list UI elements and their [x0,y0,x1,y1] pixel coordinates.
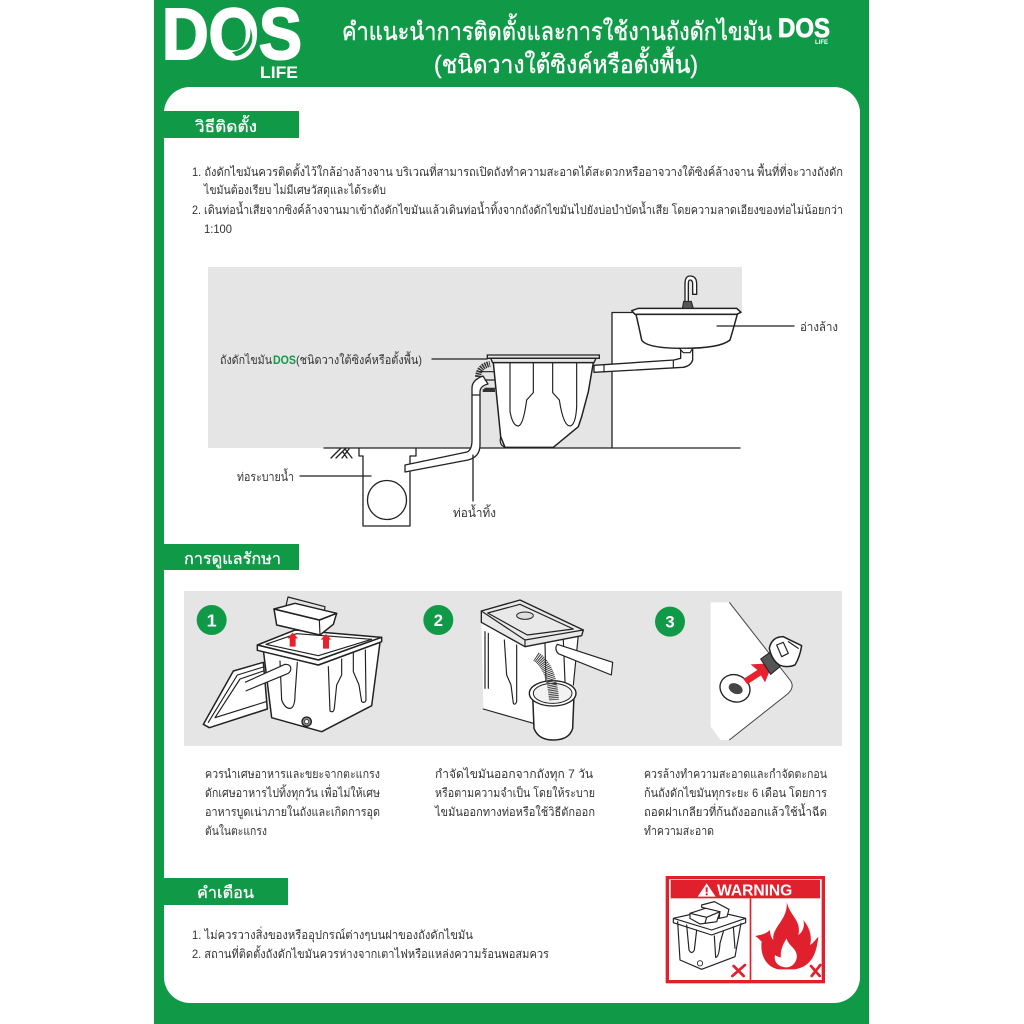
sink [632,308,741,353]
heading tab: maintenance: การดูแลรักษา [184,551,281,569]
step 1 text: ดักเศษอาหารไปทิ้งทุกวัน เพื่อไม่ให้เศษ [205,784,380,801]
loaded tank icon [673,902,746,969]
label: drain pipe: ท่อระบายน้ำ [237,468,294,484]
warning list: 2. สถานที่ติดตั้งถังดักไขมันควรห่างจากเตาไฟหรือแหล่งความร้อนพอสมควร [192,945,550,961]
step 2 text [434,767,595,819]
label: sink [717,320,838,334]
title: คำแนะนำการติดตั้งและการใช้งานถังดักไขมัน [342,13,772,46]
step 3 illustration [655,602,802,740]
badge 2: 2 [434,611,443,630]
badge 3 [655,607,685,637]
step 3 text: ก้นถังดักไขมันทุกระยะ 6 เดือน โดยการ [644,786,828,801]
heading tab: installation [164,111,299,138]
step 1 illustration [197,597,382,732]
step 3 text: ทำความสะอาด [644,824,714,838]
hose [536,657,554,700]
tank body [257,630,382,732]
divider [750,898,751,980]
bucket [529,681,576,740]
label: grease trap: (ชนิดวางใต้ซิงค์หรือตั้งพื้น) [296,351,422,367]
step 1 text: ควรนำเศษอาหารและขยะจากตะแกรง [205,767,380,781]
installation diagram [208,267,838,526]
warning list [192,926,550,961]
maintenance illustration strip [184,591,842,746]
sink drain pipe [594,348,693,372]
title: DOS [778,13,830,43]
drain ring [715,670,755,707]
warning header [671,880,820,899]
badge 2 [423,605,453,635]
ground line and block wall [324,312,740,448]
label: grease trap: DOS [273,353,296,367]
red arrow [743,663,773,684]
step 2 text: กำจัดไขมันออกจากถังทุก 7 วัน [435,767,593,782]
ground hatch [331,448,352,458]
label: grease trap: ถังดักไขมัน [220,353,272,367]
step 3 text: ควรล้างทำความสะอาดและกำจัดตะกอน [644,767,827,781]
green page background [154,0,869,1024]
label: grease trap [220,351,487,367]
flame icon [755,902,818,969]
grease trap tank [480,355,599,447]
title: (ชนิดวางใต้ซิงค์หรือตั้งพื้น) [434,46,698,79]
step 3 text: ถอดฝาเกลียวที่ก้นถังออกแล้วใช้น้ำฉีด [644,803,827,819]
step 2 text: ไขมันออกทางท่อหรือใช้วิธีตักออก [434,805,595,819]
lid leaning [203,662,267,728]
badge 1 [197,605,227,635]
label: sink: อ่างล้าง [800,320,838,334]
installation instructions: 1:100 [204,222,232,236]
heading tab: installation: วิธีติดตั้ง [195,115,257,136]
title: LIFE [815,40,828,46]
lid [481,600,583,647]
step 3 text [644,767,828,838]
tank [481,622,578,723]
drain plug [761,637,802,674]
warning list: 1. ไม่ควรวางสิ่งของหรืออุปกรณ์ต่างๆบนฝาของถังดักไขมัน [192,926,473,943]
badge 3: 3 [665,613,675,632]
outlet pipe [245,664,291,691]
step 1 text [205,767,380,838]
red arrows up [287,633,331,649]
white content panel [164,87,860,1003]
label: waste pipe: ท่อน้ำทิ้ง [453,504,496,520]
label: drain pipe [237,468,371,484]
installation instructions: ไขมันต้องเรียบ ไม่มีเศษวัสดุและได้ระดับ [203,183,386,198]
heading tab: maintenance [164,544,299,570]
badge 1: 1 [207,610,217,630]
installation instructions [192,163,843,236]
step 1 text: อาหารบูดเน่าภายในถังและเกิดการอุด [205,805,380,820]
label: waste pipe [453,455,496,520]
step 2 text: หรือตามความจำเป็น โดยให้ระบาย [435,785,595,800]
tank wall [711,602,792,740]
faucet [682,276,697,308]
pipe [556,644,613,675]
installation instructions: 1. ถังดักไขมันควรติดตั้งไว้ใกล้อ่างล้างจาน บริเวณที่สามารถเปิดถังทำความสะอาดได้สะดวกหรืออาจวางใต้ซิงค์ล้างจาน พื้นที่ที่จะวางถังดัก [192,163,843,179]
heading tab: warning: คำเตือน [197,884,254,902]
X marks [732,965,820,976]
waste pipe [405,376,488,472]
flexible hose [478,364,490,377]
step 1 text: ตันในตะแกรง [205,824,267,838]
warning header: WARNING [717,882,792,899]
installation instructions: 2. เดินท่อน้ำเสียจากซิงค์ล้างจานมาเข้าถังดักไขมันแล้วเดินท่อน้ำทิ้งจากถังดักไขมันไปยังบ่อบำบัดน้ำเสีย โดยความลาดเอียงของท่อไม่น้อยกว่า [192,201,843,217]
logo: DOS LIFE: LIFE [260,63,298,82]
warning sign [667,878,823,982]
heading tab: warning [164,878,288,905]
basket [274,597,337,635]
step 2 illustration [423,600,613,740]
title [342,13,830,79]
drain chamber [359,448,416,526]
